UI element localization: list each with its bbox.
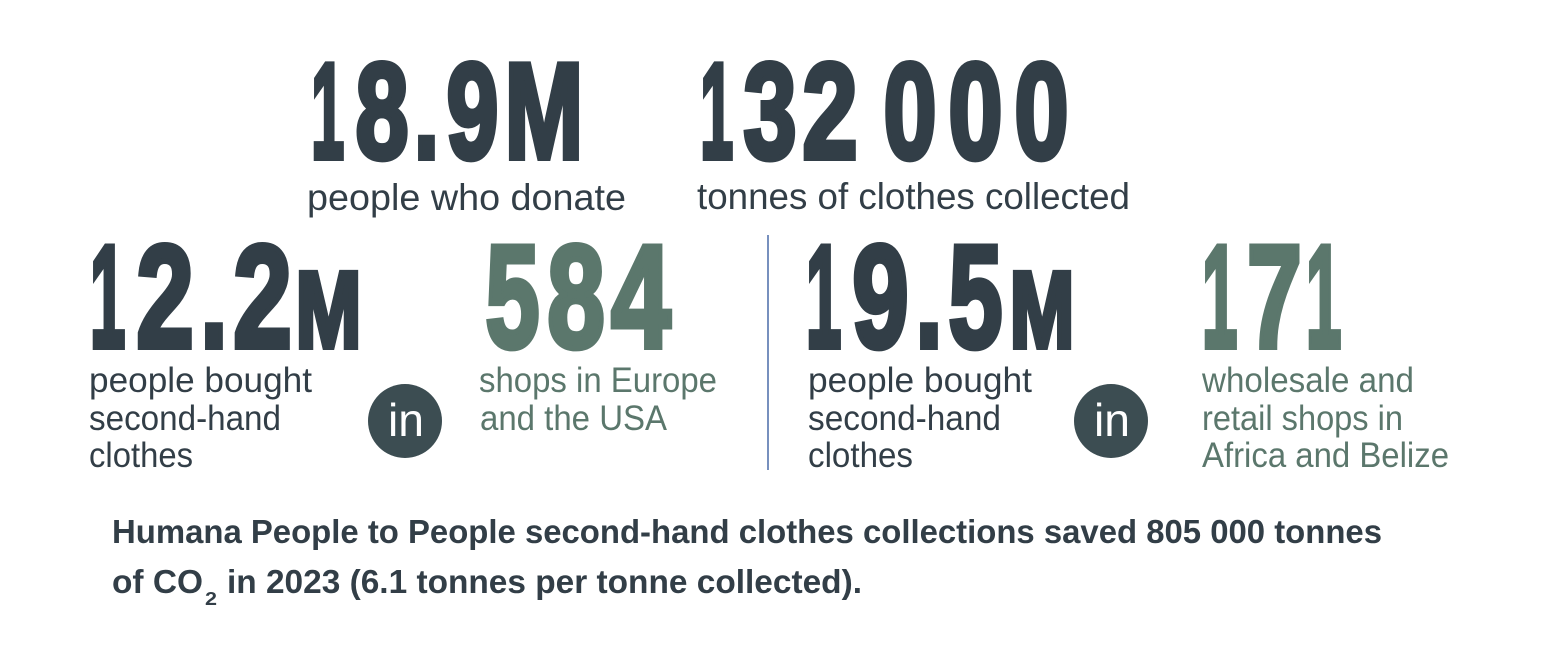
label: people bought second-hand clothes: people bought <box>89 361 312 400</box>
number: 19.5M: . <box>915 215 943 378</box>
number: 171: 7 <box>1247 215 1302 378</box>
label: shops in Europe and the USA: shops in Europe <box>479 361 717 400</box>
label: people bought second-hand clothes: second-hand <box>808 399 1001 438</box>
number: 132 000: 2 <box>802 35 858 187</box>
number: 12.2M: 1 <box>90 215 125 378</box>
number: 584: 5 <box>486 215 540 378</box>
number: 18.9M: M <box>505 35 583 187</box>
number: 12.2M: . <box>200 215 228 378</box>
note: CO2 savings <box>112 513 1382 609</box>
label: people bought second-hand clothes: clothes <box>89 436 193 475</box>
icon: in badge right <box>1074 384 1148 458</box>
number: 132 000: 1 <box>700 35 733 187</box>
number: 19.5M: M <box>1010 249 1074 370</box>
label: wholesale and retail shops in Africa and Belize: wholesale and <box>1201 361 1414 400</box>
number: 12.2M: 2 <box>136 215 194 378</box>
label: people who donate: people who donate <box>307 177 626 218</box>
number: 132 000: 0 <box>948 35 1002 187</box>
icon: in badge left <box>368 384 442 458</box>
note: CO2 savings: of CO <box>112 563 203 600</box>
stat: wholesale and retail shops <box>1201 215 1449 475</box>
stat: shops in Europe and the USA <box>479 215 717 438</box>
number: 584: 8 <box>547 215 605 378</box>
stat: buyers in Europe and the USA <box>89 215 361 475</box>
number: 19.5M: 9 <box>852 215 909 378</box>
icon: in badge left: in <box>388 394 424 446</box>
note: CO2 savings: Humana People to People second-hand clothes collections saved 805 000 tonnes <box>112 513 1382 550</box>
number: 12.2M: 2 <box>233 215 292 378</box>
label: shops in Europe and the USA: and the USA <box>480 399 668 438</box>
label: tonnes of clothes collected: tonnes of clothes collected <box>697 176 1130 217</box>
label: people bought second-hand clothes: second-hand <box>89 399 281 438</box>
number: 171: 1 <box>1202 215 1237 378</box>
number: 132 000: 0 <box>1014 35 1068 187</box>
stat: buyers in Africa and Belize <box>806 215 1074 475</box>
stat: wholesale and retail shops: 1 <box>1306 215 1341 378</box>
icon: in badge right: in <box>1094 394 1130 446</box>
label: people bought second-hand clothes: people bought <box>808 361 1032 400</box>
note: CO2 savings: 2 <box>205 589 217 609</box>
number: 12.2M: M <box>296 249 361 370</box>
number: 19.5M: 1 <box>806 215 841 378</box>
number: 18.9M: 1 <box>311 35 344 187</box>
label: people bought second-hand clothes: clothes <box>808 436 913 475</box>
number: 19.5M: 5 <box>948 215 1002 378</box>
number: 18.9M: 9 <box>447 35 498 187</box>
number: 132 000: 3 <box>744 35 796 187</box>
number: 18.9M: 8 <box>356 35 408 187</box>
stat: people who donate <box>307 35 626 218</box>
stat: tonnes collected <box>697 35 1130 217</box>
label: wholesale and retail shops in Africa and Belize: retail shops in <box>1202 399 1403 438</box>
number: 18.9M: . <box>414 35 439 187</box>
note: CO2 savings: in 2023 (6.1 tonnes per tonne collected). <box>227 563 862 600</box>
number: 584: 4 <box>611 215 671 378</box>
number: 132 000: 0 <box>884 35 936 187</box>
label: wholesale and retail shops in Africa and Belize: Africa and Belize <box>1202 436 1449 475</box>
divider <box>767 235 769 470</box>
